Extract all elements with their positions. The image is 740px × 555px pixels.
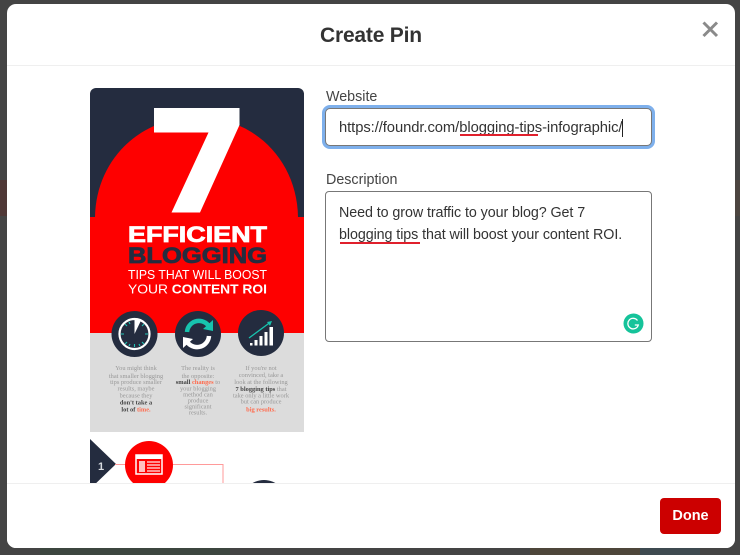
intro text columns: method can: [183, 392, 214, 398]
intro text columns: If you're not: [245, 365, 277, 372]
intro text columns: The reality is: [181, 365, 215, 372]
intro text columns: tips produce smaller: [110, 379, 163, 386]
website url: https://foundr.com/blogging-tips-infographic/: [339, 120, 622, 136]
spelling underline: [340, 242, 420, 244]
description label: Description: [326, 172, 398, 188]
intro text columns: that smaller blogging: [109, 373, 164, 380]
done button: [660, 498, 721, 534]
icon: refresh arrows: [175, 311, 221, 357]
step 1 marker: 1: [98, 461, 104, 473]
step 1 icon: [125, 441, 173, 489]
infographic header background: [90, 88, 304, 432]
description box: [325, 191, 652, 342]
intro text columns: lot of time.: [121, 406, 151, 414]
description text: blogging tips that will boost your content ROI.: [339, 227, 622, 243]
website label: Website: [326, 89, 377, 105]
website input: [325, 108, 652, 146]
intro text columns: but can produce: [241, 398, 282, 406]
icon: grammarly badge: [624, 314, 644, 334]
done button: Done: [672, 508, 709, 524]
big number 7: [154, 108, 240, 212]
intro text columns: your blogging: [180, 386, 217, 392]
intro text columns: results.: [189, 410, 208, 416]
infographic title: [128, 222, 268, 296]
intro text columns: [109, 365, 290, 416]
icon: close button: [702, 22, 718, 37]
pin image: [90, 88, 304, 483]
intro text columns: the opposite:: [182, 373, 215, 380]
footer background: [7, 484, 735, 548]
intro text columns: because they: [120, 392, 153, 400]
infographic title: TIPS THAT WILL BOOST: [128, 268, 267, 282]
step 1 marker: [90, 439, 116, 489]
intro text columns: significant: [185, 404, 212, 410]
connector lines: [115, 464, 223, 490]
intro text columns: convinced, take a: [239, 372, 283, 379]
infographic title: BLOGGING: [128, 243, 267, 268]
intro text columns: small changes to: [176, 379, 220, 386]
intro text columns: don't take a: [120, 400, 153, 406]
title: Create Pin: [320, 24, 422, 47]
description text: [339, 205, 622, 243]
footer divider: [7, 483, 735, 484]
spelling underline: [460, 134, 538, 136]
infographic title: YOUR CONTENT ROI: [128, 282, 267, 296]
intro text columns: big results.: [246, 406, 276, 414]
description text: Need to grow traffic to your blog? Get 7: [339, 205, 585, 221]
intro text columns: You might think: [115, 365, 158, 372]
intro text columns: produce: [188, 398, 208, 404]
intro text columns: look at the following: [234, 379, 289, 386]
text cursor: [622, 119, 623, 137]
intro text columns: 7 blogging tips that: [236, 386, 287, 393]
step 2 icon: [241, 480, 287, 526]
icon: clock: [112, 311, 158, 357]
header divider: [7, 65, 735, 66]
intro text columns: take only a little work: [233, 392, 290, 400]
intro text columns: results, maybe: [118, 386, 155, 392]
infographic title: EFFICIENT: [128, 222, 268, 247]
icon: growth chart: [238, 310, 284, 356]
